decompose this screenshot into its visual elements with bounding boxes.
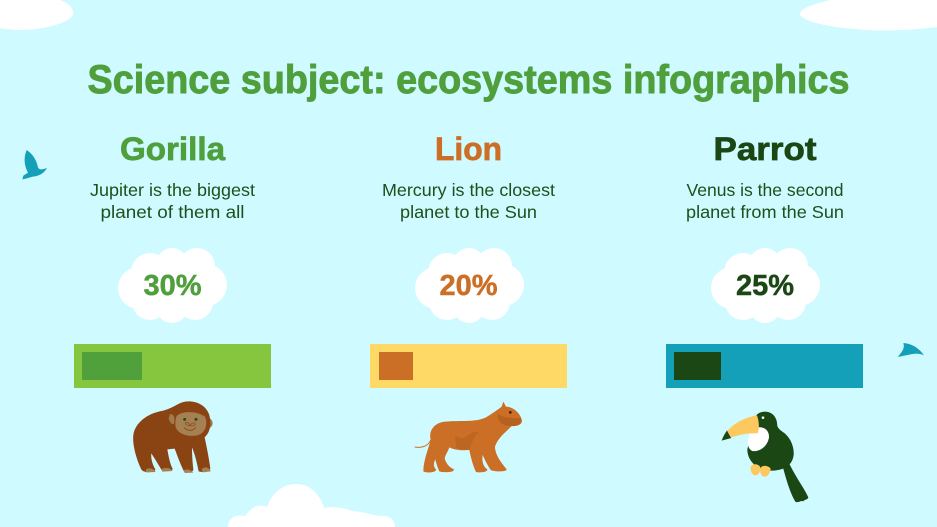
heading: Gorilla: Gorilla xyxy=(120,131,225,167)
text: lion description: planet to the Sun xyxy=(400,202,537,222)
cloud: top left xyxy=(0,0,73,30)
icon: bird left xyxy=(22,150,47,179)
text: parrot description xyxy=(686,180,844,222)
cloud: 25% value xyxy=(711,248,820,323)
title: Science subject: ecosystems infographics xyxy=(88,58,850,102)
icon: bird right xyxy=(898,343,924,357)
bar: lion 20% xyxy=(370,344,567,388)
text: gorilla description xyxy=(90,180,255,222)
cloud: bottom xyxy=(228,484,395,527)
icon: gorilla xyxy=(133,401,213,473)
text: lion description: Mercury is the closest xyxy=(382,180,555,200)
icon: lion xyxy=(415,402,522,472)
heading: Lion: Lion xyxy=(435,131,502,167)
cloud: 20% value xyxy=(415,248,524,323)
heading: Parrot: Parrot xyxy=(714,131,817,167)
column: gorilla xyxy=(74,131,271,473)
bar: parrot 25% xyxy=(666,344,863,388)
text: parrot description: Venus is the second xyxy=(686,180,844,200)
column: parrot xyxy=(666,131,863,502)
icon: toucan xyxy=(722,412,808,502)
text: gorilla description: Jupiter is the biggest xyxy=(90,180,255,200)
bar: gorilla 30% xyxy=(74,344,271,388)
cloud: 20% value: 20% xyxy=(440,270,498,302)
cloud: 25% value: 25% xyxy=(736,270,794,302)
cloud: 30% value: 30% xyxy=(144,270,202,302)
text: gorilla description: planet of them all xyxy=(100,202,244,222)
cloud: top right xyxy=(800,0,937,30)
column: lion xyxy=(370,131,567,472)
text: lion description xyxy=(382,180,555,222)
text: parrot description: planet from the Sun xyxy=(686,202,844,222)
cloud: 30% value xyxy=(118,248,227,323)
